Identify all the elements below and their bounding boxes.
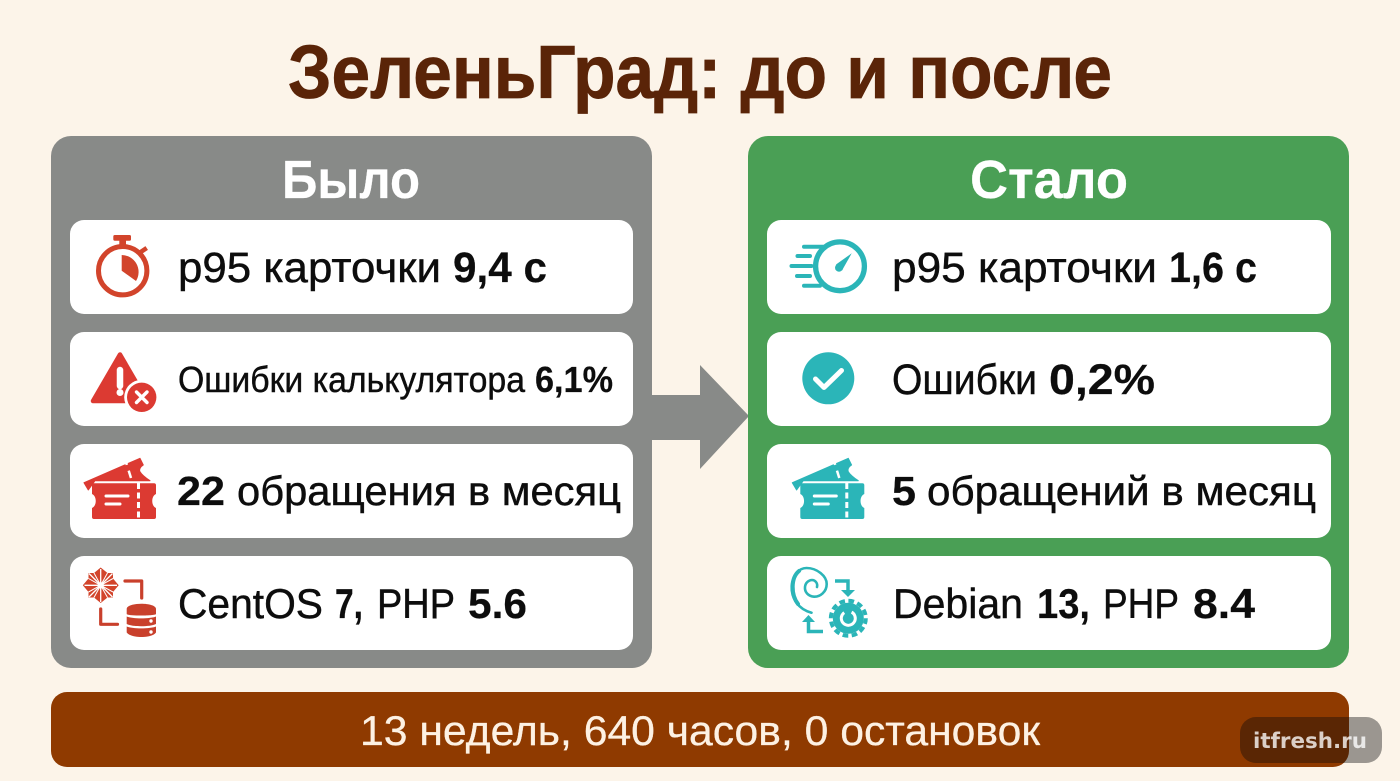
metric text: 1,6 с <box>1169 244 1257 292</box>
watermark: itfresh.ru <box>1253 729 1367 753</box>
metric text <box>178 580 527 627</box>
metric text: p95 карточки <box>178 244 441 292</box>
metric text: CentOS <box>178 580 323 627</box>
icon: tickets <box>84 458 156 519</box>
metric text: 0,2% <box>1049 356 1155 404</box>
metric text: обращения в месяц <box>237 468 621 514</box>
metric text: PHP <box>377 580 455 627</box>
metric text: Debian <box>893 580 1023 627</box>
metric text <box>893 580 1256 627</box>
icon: stopwatch <box>98 235 147 295</box>
metric text: 6,1% <box>535 359 613 400</box>
metric text: 9,4 с <box>453 244 547 292</box>
row: errors before <box>70 332 633 426</box>
metric text: 8.4 <box>1193 580 1256 627</box>
heading: after: Стало <box>970 150 1128 210</box>
panel: before <box>51 136 652 668</box>
row: errors after <box>767 332 1331 426</box>
row: p95 before <box>70 220 633 314</box>
title: ЗеленьГрад: до и после <box>288 30 1112 114</box>
icon: CentOS to database <box>83 568 156 637</box>
metric text <box>892 356 1155 404</box>
metric text: обращений в месяц <box>927 468 1316 514</box>
icon: warning with cross <box>93 354 159 415</box>
footer text: 13 недель, 640 часов, 0 остановок <box>360 707 1041 754</box>
panel: after <box>748 136 1349 668</box>
metric text: 5.6 <box>468 580 527 627</box>
arrow: before to after <box>640 365 749 469</box>
icon: tickets <box>792 458 864 519</box>
metric text: Ошибки калькулятора <box>178 359 526 400</box>
metric text: 13, <box>1037 580 1090 627</box>
metric text: 7, <box>335 580 363 627</box>
icon: speedometer <box>792 242 864 291</box>
row: tickets after <box>767 444 1331 538</box>
metric text: 5 <box>892 468 916 514</box>
row: p95 after <box>767 220 1331 314</box>
metric text: Ошибки <box>892 356 1037 404</box>
icon: check mark <box>802 352 854 404</box>
row: stack before <box>70 556 633 650</box>
watermark <box>1240 717 1382 763</box>
heading: before: Было <box>282 150 420 210</box>
icon: Debian to gear <box>792 568 866 636</box>
footer banner <box>51 692 1349 767</box>
row: stack after <box>767 556 1331 650</box>
metric text: PHP <box>1103 580 1179 627</box>
metric text <box>178 244 547 292</box>
metric text: 22 <box>177 468 225 514</box>
row: tickets before <box>70 444 633 538</box>
metric text: p95 карточки <box>892 244 1157 292</box>
